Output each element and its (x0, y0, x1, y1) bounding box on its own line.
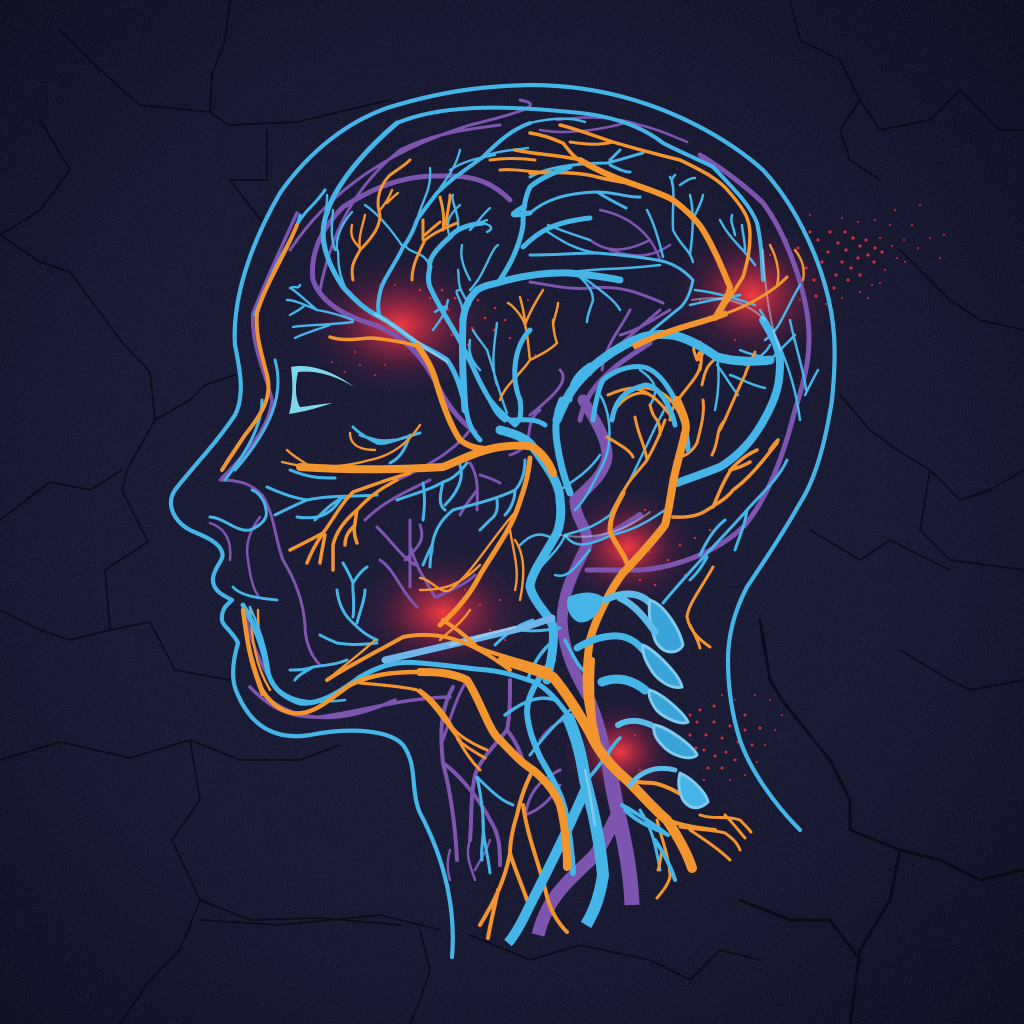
red glow spots (300, 223, 837, 804)
head outline (171, 85, 835, 957)
thin orange branches (243, 125, 804, 938)
face lines and small strands (210, 360, 345, 702)
purple vessels (210, 100, 809, 880)
vertebrae teardrops (567, 592, 708, 808)
cyan main vessels (243, 108, 780, 943)
eye (289, 366, 354, 414)
thin cyan branches (267, 119, 818, 873)
red speckles (332, 205, 944, 780)
purple thick trunks (538, 400, 640, 935)
pale highlight vessels near glow (375, 250, 780, 825)
orange main vessels (222, 160, 787, 868)
